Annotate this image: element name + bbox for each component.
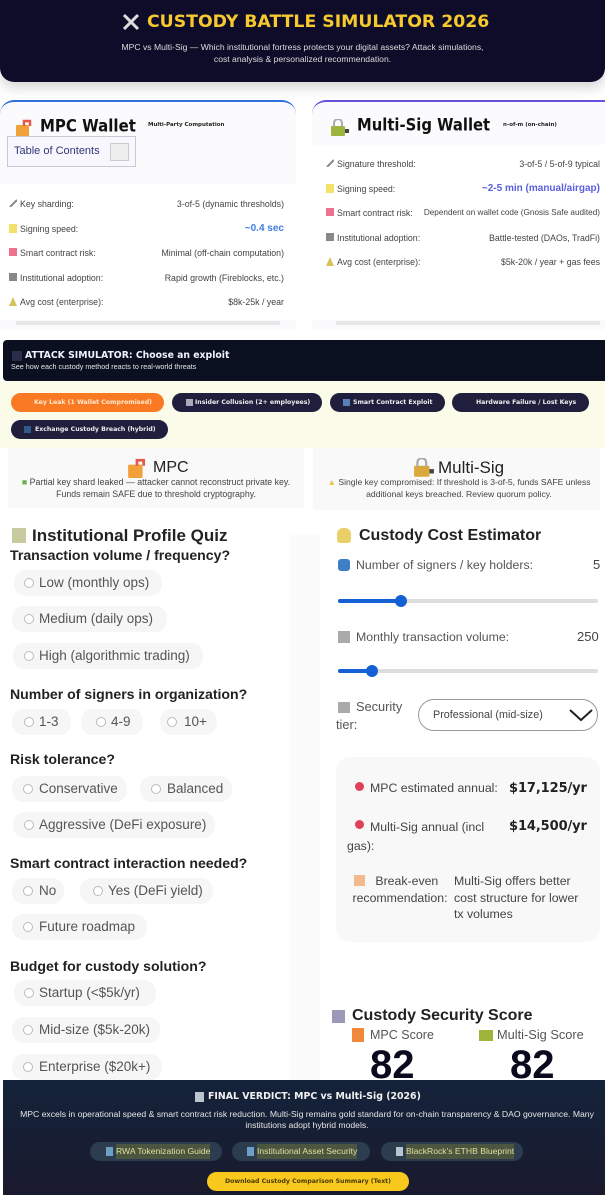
button: key leak: Key Leak (1 Wallet Compromised) [34, 399, 152, 406]
icon: chart [332, 1010, 345, 1023]
label: tier: tier: [336, 717, 357, 732]
heading: security score: Custody Security Score [352, 1007, 532, 1024]
icon: clipboard [12, 528, 26, 543]
MPC annual value: $17,125/yr [509, 781, 587, 796]
row: average cost: Avg cost (enterprise): [337, 257, 420, 267]
link: BlackRock ETHB blueprint: BlackRock's ETHB Blueprint [406, 1146, 514, 1156]
option: 4-9 [81, 709, 143, 735]
icon: Multi-Sig lock [479, 1030, 493, 1041]
question 1: Transaction volume / frequency? [10, 547, 230, 563]
option: 1-3: 1-3 [39, 714, 59, 729]
option: balanced: Balanced [167, 781, 223, 796]
heading: attack simulator: ATTACK SIMULATOR: Choose an exploit [25, 350, 229, 361]
option: yes: Yes (DeFi yield) [108, 883, 203, 898]
recommendation value: Multi-Sig offers better cost structure for lower tx volumes [454, 874, 578, 921]
panel: security score [332, 1007, 584, 1087]
cost results card [336, 757, 600, 942]
slider: volume [338, 665, 598, 677]
icon: bank [195, 1092, 204, 1102]
link: BlackRock ETHB blueprint [381, 1142, 523, 1161]
TOC label: Table of Contents [14, 145, 100, 157]
caption: multi-party computation: Multi-Party Computation [148, 122, 224, 128]
option: mid-size [12, 1017, 160, 1043]
panel: MPC attack result [8, 448, 304, 508]
icon: target [12, 351, 22, 361]
value: volume: 250 [577, 629, 599, 644]
heading: quiz: Institutional Profile Quiz [32, 526, 228, 545]
panel: institutional profile quiz [0, 526, 289, 1080]
row: signature threshold [326, 159, 600, 169]
option: aggressive [13, 812, 215, 838]
option: startup [14, 980, 156, 1006]
row: average cost: $5k-20k / year + gas fees [501, 257, 600, 267]
button: insider collusion [172, 393, 322, 412]
button: download summary: Download Custody Comparison Summary (Text) [225, 1178, 391, 1185]
button: hardware failure: Hardware Failure / Lost Keys [476, 399, 576, 406]
row: institutional adoption: Rapid growth (Fireblocks, etc.) [165, 273, 284, 283]
icon: crossed swords [123, 14, 139, 30]
result text: MPC [22, 477, 290, 499]
row: signature threshold: 3-of-5 / 5-of-9 typical [519, 159, 600, 169]
icon: security [338, 702, 350, 713]
specification rows [312, 145, 605, 320]
button: smart contract exploit [330, 393, 445, 412]
row: smart contract risk: Smart contract risk: [20, 248, 96, 258]
value: MPC score: 82 [370, 1043, 414, 1087]
title: CUSTODY BATTLE SIMULATOR 2026 [147, 12, 489, 32]
value: Multi-Sig score: 82 [510, 1043, 554, 1087]
row: institutional adoption [9, 273, 284, 283]
option: high: High (algorithmic trading) [39, 648, 190, 663]
result title: MPC: MPC [153, 459, 189, 476]
subtitle: cost analysis & personalized recommendation. [214, 54, 391, 64]
row: institutional adoption [326, 233, 600, 243]
button: insider collusion: Insider Collusion (2+ employees) [195, 399, 310, 406]
option: conservative [12, 776, 127, 802]
row: key sharding: 3-of-5 (dynamic thresholds) [177, 199, 284, 209]
icon: locked with key [331, 119, 349, 136]
option: 10+: 10+ [184, 714, 207, 729]
option: enterprise: Enterprise ($20k+) [39, 1059, 150, 1074]
icon: MPC lock [352, 1028, 364, 1042]
button: hardware failure [452, 393, 589, 412]
link: institutional asset security: Institutional Asset Security [257, 1146, 357, 1156]
icon: scale [354, 875, 365, 886]
option: mid-size: Mid-size ($5k-20k) [39, 1022, 150, 1037]
option: future: Future roadmap [39, 919, 135, 934]
row: signing speed [9, 223, 284, 234]
header banner [0, 0, 605, 82]
icon: Multi-Sig lock [414, 458, 434, 477]
verdict text: MPC excels in operational speed & smart contract risk reduction. Multi-Sig remains gold standard for on-chain transparency & DAO governance. Many institutions adopt hybrid models. [20, 1109, 594, 1130]
row: average cost [326, 257, 600, 267]
option: high [13, 643, 203, 669]
value: signers: 5 [593, 557, 600, 572]
option: balanced [140, 776, 232, 802]
button: download summary [207, 1172, 409, 1191]
row: smart contract risk: Smart contract risk: [337, 208, 413, 218]
attack simulator description: See how each custody method reacts to real-world threats [11, 362, 196, 371]
link: RWA tokenization guide: RWA Tokenization Guide [116, 1146, 210, 1156]
Multi-Sig annual value: $14,500/yr [509, 819, 587, 834]
icon: TOC toggle [110, 143, 129, 161]
link: institutional asset security [232, 1142, 370, 1161]
result title: Multi-Sig: Multi-Sig [438, 458, 504, 477]
row: key sharding: Key sharding: [20, 199, 74, 209]
row: key sharding [9, 199, 284, 209]
panel: MPC wallet [0, 100, 296, 330]
row: smart contract risk: Dependent on wallet code (Gnosis Safe audited) [424, 208, 600, 217]
option: low: Low (monthly ops) [39, 575, 149, 590]
option: future [12, 914, 147, 940]
MPC annual label: MPC estimated annual: [370, 781, 498, 795]
option: low [14, 570, 162, 596]
result text: Multi-Sig: ▲ Single key compromised: If threshold is 3-of-5, funds SAFE unless [327, 477, 591, 487]
Multi-Sig annual label: Multi-Sig annual (incl gas): [347, 820, 484, 853]
link: RWA tokenization guide [90, 1142, 222, 1161]
result text: Multi-Sig: additional keys breached. Review quorum policy. [366, 488, 552, 498]
question 5: Budget for custody solution? [10, 958, 207, 974]
result text: MPC: ■ Partial key shard leaked — attacker cannot reconstruct private key. [22, 477, 290, 487]
row: smart contract risk [9, 248, 284, 258]
row: signature threshold: Signature threshold: [337, 159, 416, 169]
row: smart contract risk: Minimal (off-chain computation) [161, 248, 284, 258]
icon: lock MPC [16, 120, 32, 136]
icon: signers [338, 559, 350, 571]
slider: signers [338, 595, 598, 607]
question 2: Number of signers in organization? [10, 686, 247, 702]
result text: Multi-Sig [327, 477, 591, 498]
option: medium [12, 606, 167, 632]
label: volume: Monthly transaction volume: [356, 630, 509, 644]
table of contents box [7, 136, 136, 167]
option: yes [80, 878, 213, 904]
panel: attack simulator header [3, 340, 605, 381]
row: signing speed: ~2-5 min (manual/airgap) [482, 183, 600, 194]
question 3: Risk tolerance? [10, 751, 115, 767]
icon: volume [338, 631, 350, 643]
dropdown value: Professional (mid-size) [433, 709, 543, 721]
row: signing speed: ~0.4 sec [245, 223, 284, 234]
panel: cost estimator [320, 525, 605, 950]
specification rows [0, 184, 296, 320]
button: key leak [11, 393, 164, 412]
row: signing speed: Signing speed: [20, 224, 78, 234]
label: signers: Number of signers / key holders: [356, 558, 533, 572]
subtitle [121, 42, 484, 64]
button: exchange custody breach [11, 420, 168, 439]
heading: MPC Wallet: MPC Wallet [40, 116, 136, 136]
option: no [12, 878, 64, 904]
option: startup: Startup (<$5k/yr) [39, 985, 140, 1000]
heading: final verdict: FINAL VERDICT: MPC vs Multi-Sig (2026) [208, 1091, 421, 1102]
icon: chevron [569, 709, 593, 722]
recommendation label: Break-even recommendation: [352, 874, 448, 904]
icon: pin [355, 782, 364, 791]
question 4: Smart contract interaction needed? [10, 855, 247, 871]
option: medium: Medium (daily ops) [39, 611, 153, 626]
option: 1-3 [12, 709, 71, 735]
row: institutional adoption: Battle-tested (DAOs, TradFi) [489, 233, 600, 243]
panel: Multi-Sig attack result [313, 448, 600, 510]
option: conservative: Conservative [39, 781, 118, 796]
heading: Multi-Sig Wallet: Multi-Sig Wallet [357, 116, 490, 135]
row: institutional adoption: Institutional adoption: [20, 273, 103, 283]
result text: MPC: Funds remain SAFE due to threshold cryptography. [56, 488, 256, 498]
option: aggressive: Aggressive (DeFi exposure) [39, 817, 206, 832]
row: signing speed [326, 183, 600, 194]
icon: pin [355, 820, 364, 829]
subtitle: MPC vs Multi-Sig — Which institutional fortress protects your digital assets? Attack simulations, [121, 42, 484, 52]
row: institutional adoption: Institutional adoption: [337, 233, 420, 243]
option: no: No [39, 883, 56, 898]
row: average cost: Avg cost (enterprise): [20, 297, 103, 307]
dropdown: security tier [418, 699, 598, 731]
panel: final verdict [3, 1080, 605, 1195]
row: average cost: $8k-25k / year [228, 297, 284, 307]
option: enterprise [12, 1054, 162, 1080]
option: 10+ [160, 709, 217, 735]
row: average cost [9, 297, 284, 307]
icon: MPC lock [128, 458, 146, 478]
icon: money bag [337, 528, 351, 543]
panel: Multi-Sig wallet [312, 100, 605, 330]
label: MPC score: MPC Score [370, 1028, 434, 1042]
button: smart contract exploit: Smart Contract Exploit [353, 399, 433, 406]
button: exchange custody breach: Exchange Custody Breach (hybrid) [35, 426, 156, 433]
label: security tier: Security [356, 699, 402, 714]
caption: on-chain: n-of-m (on-chain) [503, 122, 557, 128]
label: Multi-Sig score: Multi-Sig Score [497, 1027, 584, 1042]
panel: exploit buttons [0, 381, 605, 448]
option: 4-9: 4-9 [111, 714, 131, 729]
row: smart contract risk [326, 208, 600, 218]
row: signing speed: Signing speed: [337, 184, 395, 194]
heading: cost estimator: Custody Cost Estimator [359, 527, 541, 544]
